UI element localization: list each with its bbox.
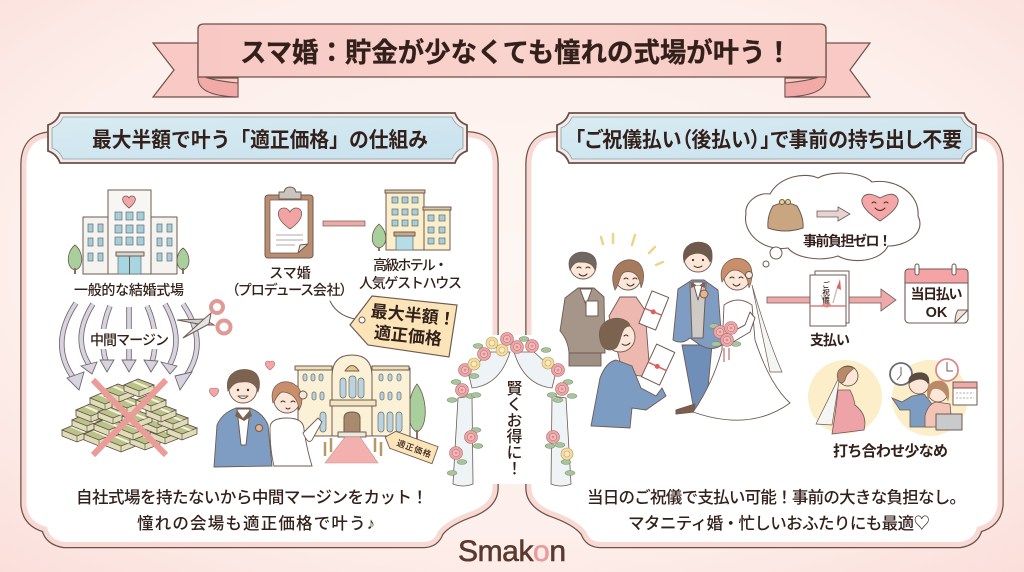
icon: gift envelope: ご祝儀 [821, 280, 830, 304]
illustration: groom [673, 242, 722, 414]
text block: right description: マタニティ婚・忙しいおふたりにも最適♡ [628, 514, 930, 533]
arrow: payment [767, 289, 896, 311]
heading: left plate: 最大半額で叶う「適正価格」の仕組み [92, 129, 428, 152]
icon: scissors [177, 301, 230, 338]
small price tag: 適正価格 [395, 438, 433, 460]
arrows: margin flow [62, 303, 197, 390]
icon: calendar [905, 264, 968, 323]
label: general venue: 一般的な結婚式場 [74, 282, 184, 298]
cross [93, 380, 166, 455]
icon: smiling heart [862, 194, 898, 221]
callout: price tag [330, 296, 457, 357]
label: hotel and guesthouse: 人気ゲストハウス [359, 275, 462, 291]
arrow [817, 207, 850, 221]
text block: left description: 自社式場を持たないから中間マージンをカット！ [76, 488, 428, 507]
label: Smakon producer: スマ婚 [269, 265, 311, 281]
heading: left plate [48, 113, 467, 163]
illustration: bride at venue [270, 382, 322, 466]
label: middle margin: 中間マージン [90, 332, 169, 348]
icon: luxury hotel [372, 190, 451, 251]
icon: gift envelope [810, 271, 849, 326]
icon: money pile with cross [62, 379, 197, 455]
icon: purse [768, 203, 803, 231]
label: Smakon producer: （プロデュース会社） [232, 282, 347, 298]
callout: price tag: 最大半額！ [370, 302, 456, 329]
text block: right description [587, 488, 966, 533]
carpet [325, 437, 378, 463]
illustration: venue [295, 355, 425, 463]
label: vertical slogan: 賢くお得に！ [504, 380, 522, 476]
icon: general wedding venue building [68, 190, 189, 274]
hearts [209, 361, 275, 397]
label: payment: 支払い [810, 332, 850, 348]
illustration: flower arch [447, 332, 577, 486]
label: fewer meetings: 打ち合わせ少なめ [833, 442, 948, 460]
title: スマ婚：貯金が少なくても憧れの式場が叶う！ [240, 37, 792, 68]
text block: left description [76, 488, 428, 533]
title ribbon [153, 24, 870, 97]
illustration: mother [609, 260, 669, 376]
heading: right plate: 「ご祝儀払い（後払い）」で事前の持ち出し不要 [575, 128, 962, 152]
illustration: kneeling guest [591, 318, 675, 428]
logo: Smakon [458, 535, 566, 568]
illustration: bride [693, 258, 790, 420]
illustration: groom at venue [209, 361, 275, 467]
text block: left description: 憧れの会場も適正価格で叶う♪ [137, 514, 375, 533]
connector line [323, 221, 365, 226]
illustration: sparkle [601, 234, 663, 265]
panel: left frame [24, 135, 495, 544]
bouquet [709, 322, 741, 362]
white backing behind arch [488, 335, 538, 484]
label: hotel and guesthouse: 高級ホテル・ [373, 257, 448, 273]
callout: thought cloud [745, 173, 920, 267]
label: 事前負担ゼロ！ [803, 233, 892, 249]
icon: calendar: 当日払い [910, 286, 962, 302]
illustration: father [560, 252, 605, 366]
illustration: pregnant bride [808, 360, 882, 434]
illustration: busy couple [890, 359, 977, 436]
callout: price tag: 適正価格 [373, 323, 443, 349]
label: hotel and guesthouse [359, 257, 462, 291]
icon: clipboard [265, 187, 313, 258]
text block: right description: 当日のご祝儀で支払い可能！事前の大きな負担なし。 [587, 488, 966, 507]
label: Smakon producer [232, 265, 347, 298]
small price tag [382, 429, 438, 464]
panel: right frame [529, 135, 1000, 544]
icon: calendar: OK [926, 305, 948, 321]
heading: right plate [557, 113, 976, 163]
